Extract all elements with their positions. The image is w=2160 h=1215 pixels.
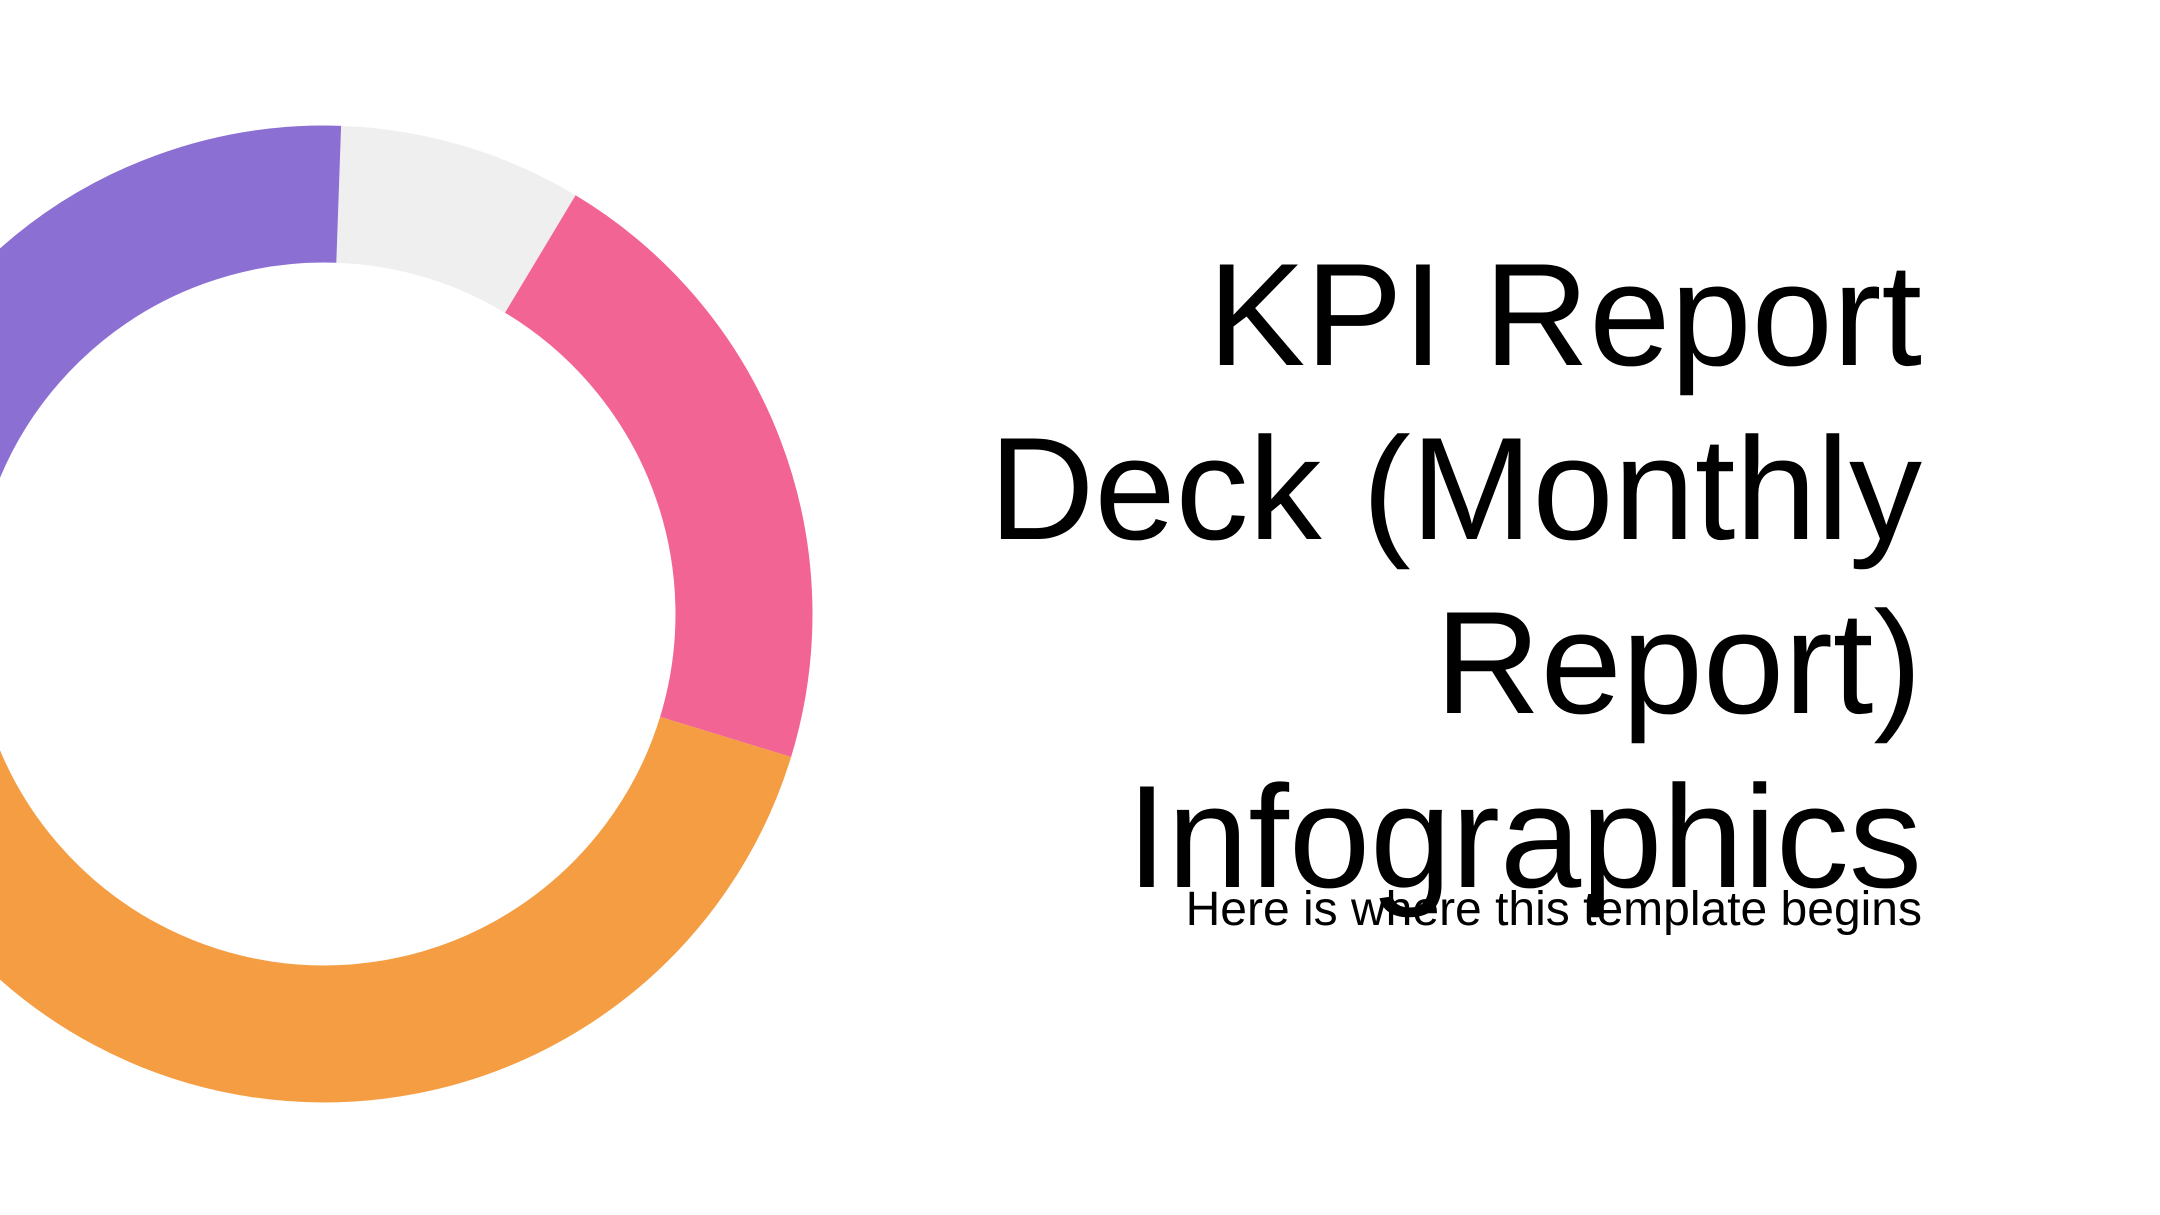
title: Report) (1435, 581, 1922, 744)
segment: purple (0, 194, 339, 614)
title: Infographics (1127, 755, 1922, 918)
segment: orange (0, 614, 726, 1034)
title: Deck (Monthly (989, 407, 1922, 570)
title (989, 233, 1922, 918)
subtitle: Here is where this template begins (1186, 883, 1922, 936)
segment: pink (540, 254, 744, 737)
title: KPI Report (1208, 233, 1922, 396)
donut chart (0, 194, 744, 1034)
segment: gray (339, 194, 540, 254)
